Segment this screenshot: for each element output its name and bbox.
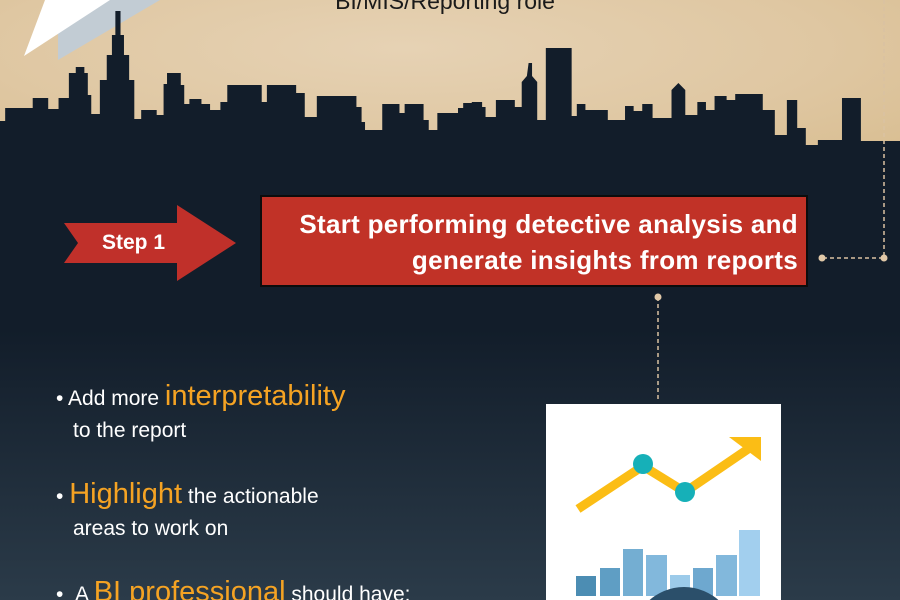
arrow: step 1 [64,205,236,281]
step 1 box: generate insights from reports [412,245,798,275]
chart card [546,404,781,600]
step 1 box [260,195,808,287]
icon: paper plane [24,0,160,60]
city skyline [0,11,900,160]
bullet: interpretability [56,380,346,442]
step 1 box: Start performing detective analysis and [299,209,798,239]
bullet: interpretability: • Add more interpretability [56,380,345,412]
bar chart [576,530,760,596]
bullet: interpretability: to the report [73,419,186,442]
tan sky background [0,0,900,160]
arrow: step 1: Step 1 [102,231,165,254]
line chart [578,437,761,509]
bullet: highlight [56,478,319,540]
bullet: highlight: • Highlight the actionable [56,478,319,510]
bullet list [56,380,410,600]
bullet: highlight: areas to work on [73,517,228,540]
